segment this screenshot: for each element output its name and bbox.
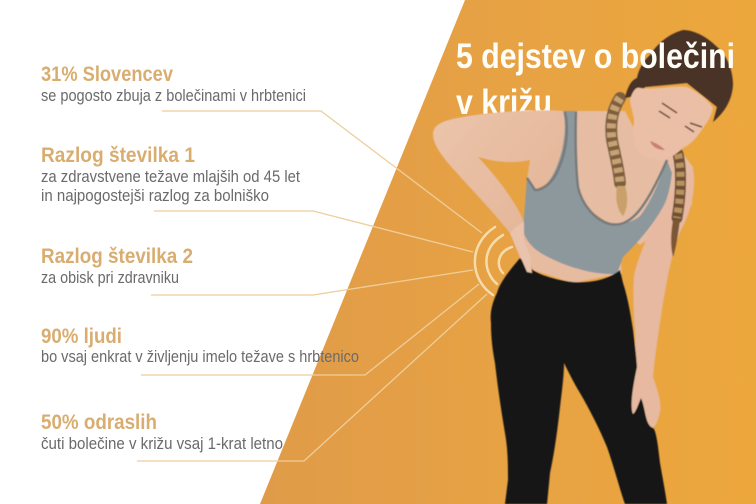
right arm (631, 167, 694, 428)
fact 4: 90% ljudi (41, 324, 122, 348)
connector lines (137, 111, 487, 461)
fact 3: Razlog številka 2 (41, 244, 193, 268)
fact 1: 31% Slovencev (41, 62, 173, 86)
mouth (650, 141, 665, 150)
facial features (659, 103, 702, 132)
right braid (677, 154, 681, 218)
fact 1 (41, 62, 306, 105)
top strap trim (527, 112, 667, 225)
fact 2: za zdravstvene težave mlajših od 45 let (41, 168, 300, 186)
title line 2: v križu (456, 83, 552, 122)
pain waves icon (475, 227, 512, 295)
hair (625, 30, 733, 122)
midriff (523, 240, 622, 283)
fact 2: in najpogostejši razlog za bolniško (41, 187, 269, 205)
grey sports top (523, 111, 672, 274)
fact 4: bo vsaj enkrat v življenju imelo težave s hrbtenico (41, 348, 359, 366)
fact 2: Razlog številka 1 (41, 143, 195, 167)
chest and neck (563, 111, 693, 245)
fact 2 (41, 143, 300, 205)
right braid tail (671, 220, 680, 257)
fact 5: 50% odraslih (41, 410, 157, 434)
woman holding her lower back (433, 30, 733, 504)
hand on back (510, 222, 532, 273)
fact 4 (41, 324, 359, 366)
left braid tail (616, 186, 627, 216)
black leggings (491, 258, 667, 504)
fact 3: za obisk pri zdravniku (41, 269, 179, 287)
fact 1: se pogosto zbuja z bolečinami v hrbtenici (41, 87, 306, 105)
left braid (611, 98, 620, 183)
raised arm (433, 110, 570, 273)
fact 3 (41, 244, 193, 287)
orange diagonal background panel (260, 0, 756, 504)
fact 5 (41, 410, 283, 453)
fact 5: čuti bolečine v križu vsaj 1-krat letno (41, 435, 283, 453)
face (630, 87, 713, 160)
